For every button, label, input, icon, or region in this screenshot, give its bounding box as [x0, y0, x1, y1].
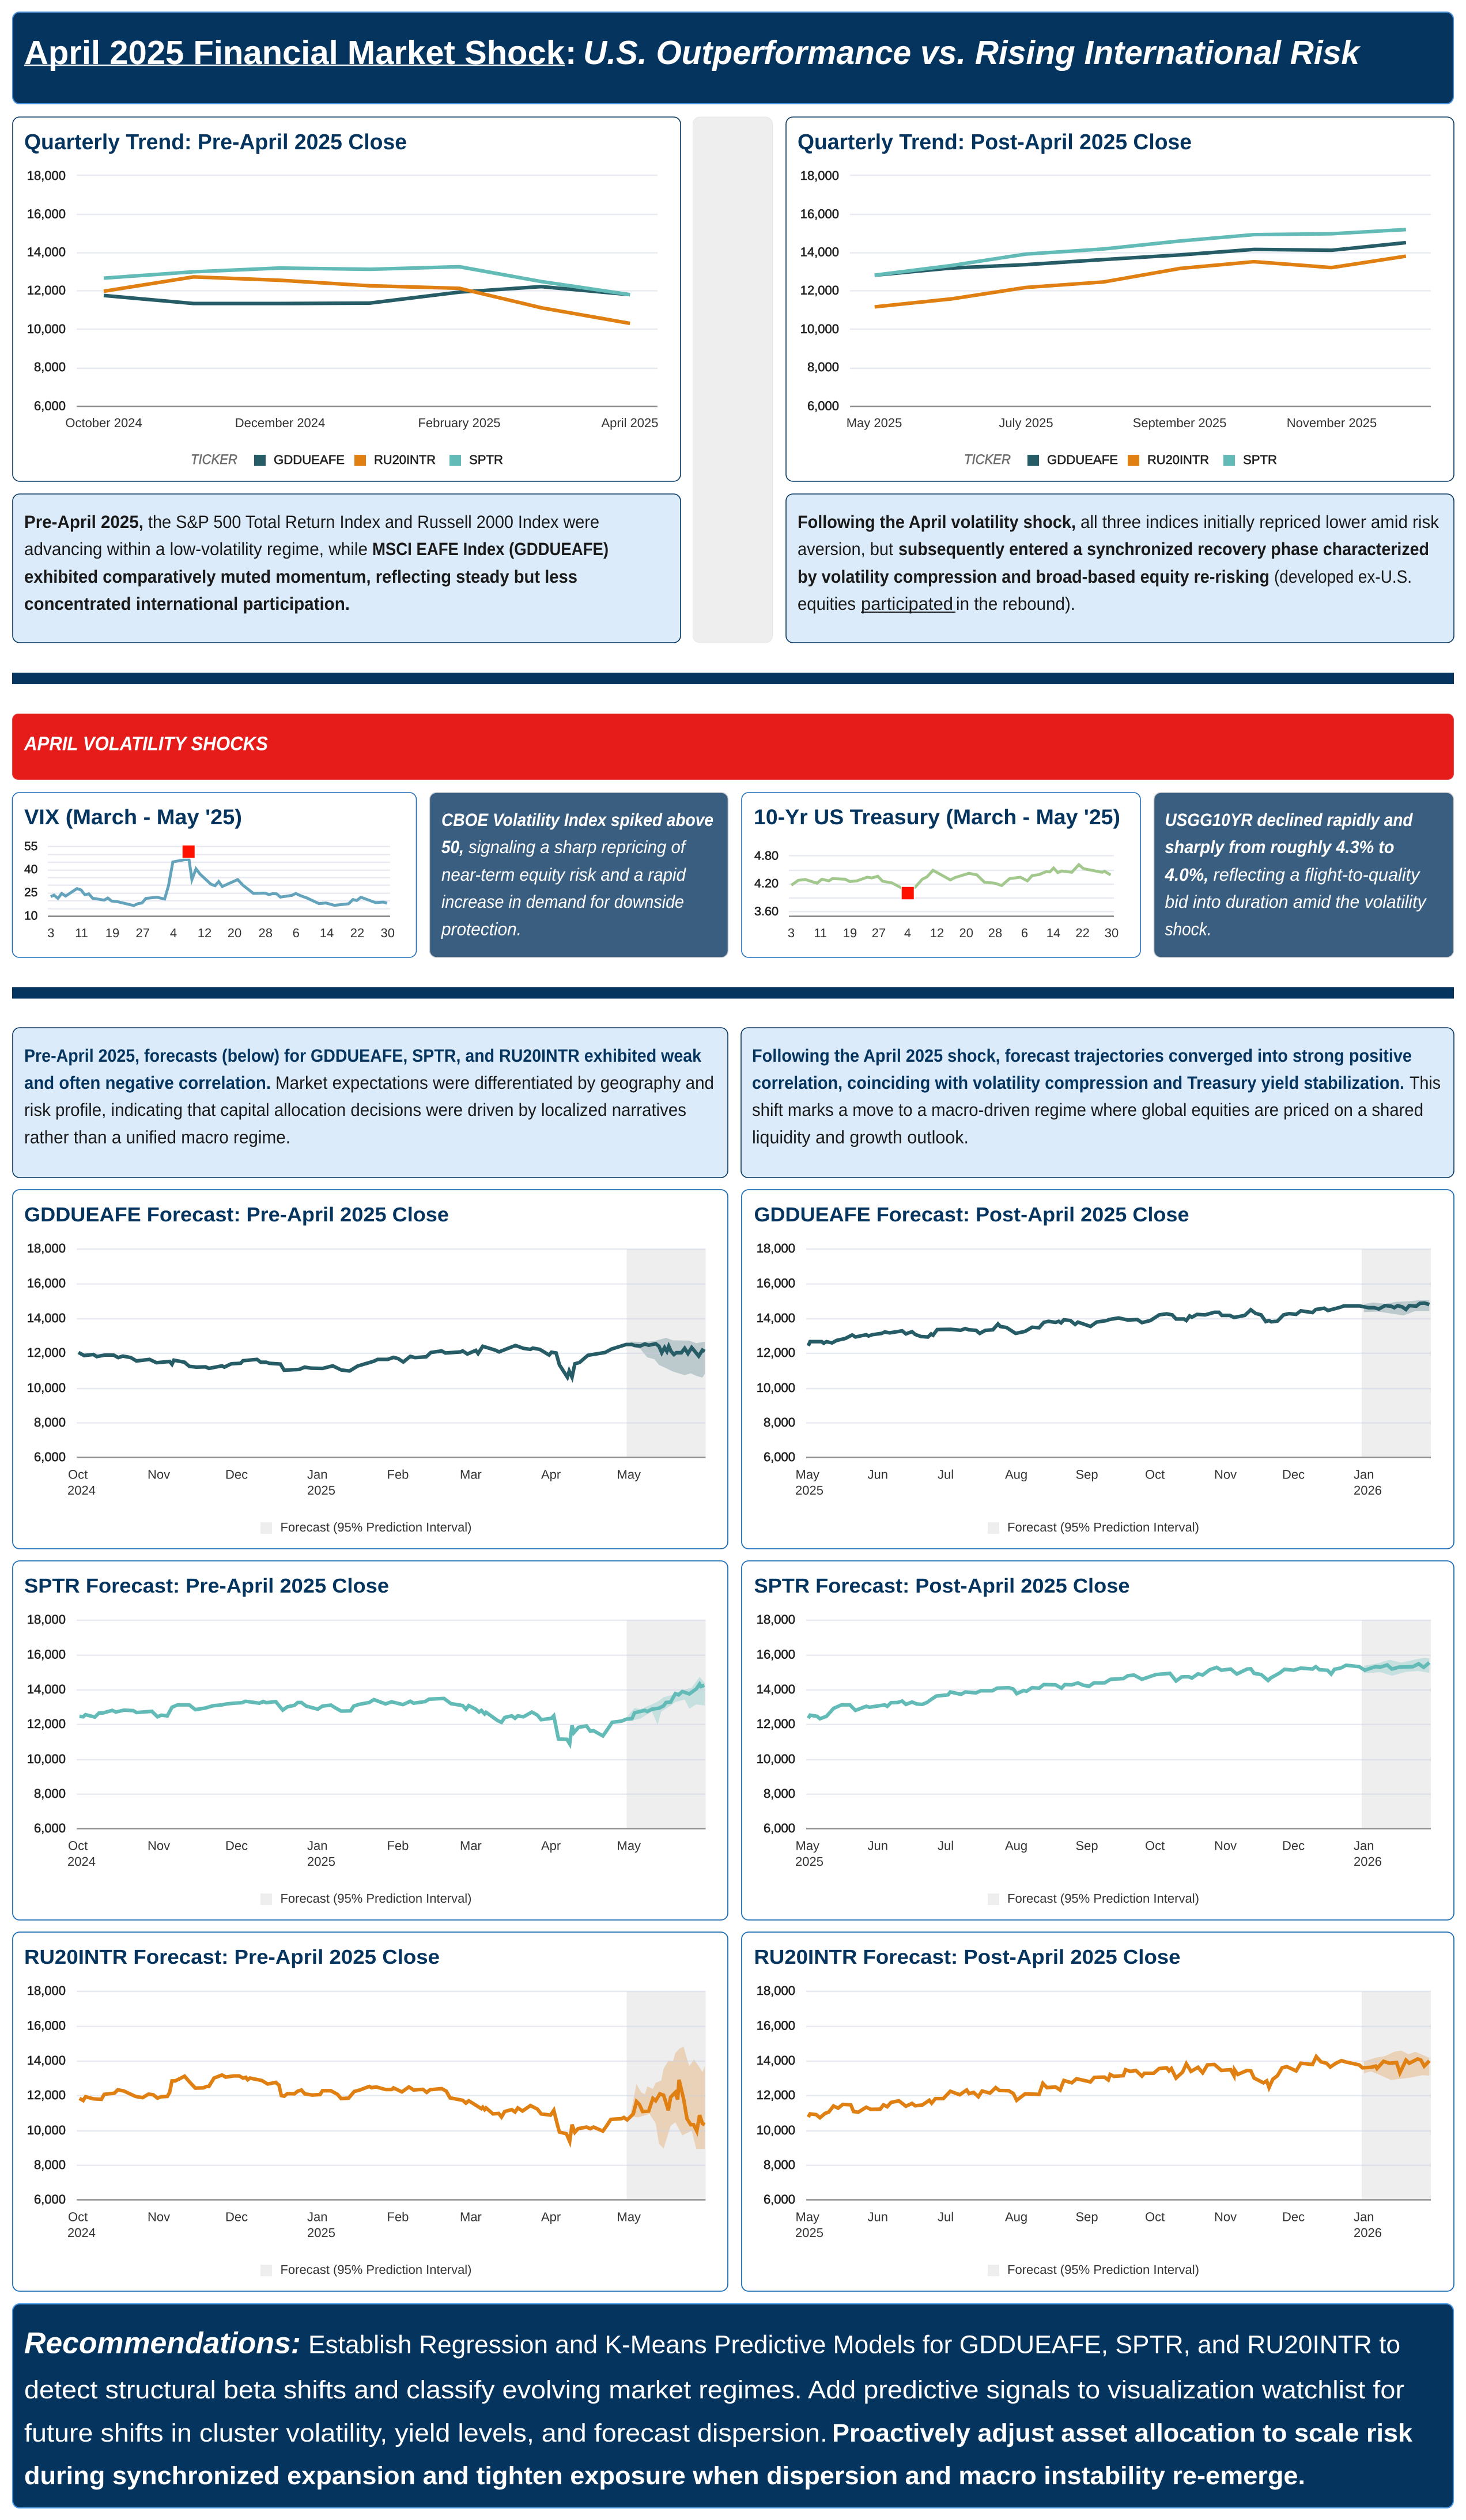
- line chart: VIX: 20: [228, 926, 241, 940]
- line chart: 10-year Treasury: 20: [959, 926, 973, 940]
- panel: post-April forecast commentary: liquidity and growth outlook.: [752, 1127, 969, 1147]
- line chart: 10-year Treasury: 22: [1075, 926, 1090, 940]
- line chart with forecast band: 2025: [795, 2225, 823, 2240]
- line chart with forecast band: 16,000: [757, 2019, 795, 2032]
- line chart with forecast band: 8,000: [764, 1415, 795, 1429]
- callout: Treasury commentary: sharply from roughly 4.3% to: [1165, 837, 1395, 857]
- panel: post-April forecast commentary: This: [1410, 1073, 1441, 1093]
- callout: Treasury commentary: bid into duration amid the volatility: [1165, 892, 1427, 912]
- line chart with forecast band: Dec: [1282, 2210, 1305, 2224]
- line chart with forecast band: 12,000: [27, 2088, 66, 2102]
- line chart: VIX: 12: [198, 926, 211, 940]
- heading: SPTR Forecast: Pre-April 2025 Close: [24, 1575, 389, 1597]
- line chart: VIX: 4: [170, 926, 177, 940]
- heading: quarterly trend post-April: Quarterly Trend: Post-April 2025 Close: [798, 130, 1192, 154]
- line chart with forecast band: Jun: [868, 1839, 888, 1853]
- line chart with forecast band: 6,000: [764, 2192, 795, 2206]
- line chart with forecast band: Oct: [68, 1839, 88, 1853]
- line chart with forecast band: May: [795, 2210, 819, 2224]
- legend: tickers: RU20INTR: [1147, 452, 1209, 467]
- panel: pre-April forecast commentary: risk profile, indicating that capital allocation decisions were driven by localized narratives: [24, 1100, 686, 1120]
- line chart with forecast band: 14,000: [757, 1682, 795, 1696]
- line chart with forecast band: 8,000: [34, 1415, 66, 1429]
- legend: tickers: [191, 452, 503, 467]
- line chart with forecast band: 2025: [795, 1483, 823, 1497]
- panel: post-April forecast commentary: correlation, coinciding with volatility compression and Treasury yield stabilization.: [752, 1073, 1404, 1093]
- line chart with forecast band: 18,000: [27, 1612, 66, 1627]
- line chart with forecast band: Jul: [938, 1468, 954, 1481]
- heading: SPTR Forecast: Post-April 2025 Close: [754, 1575, 1129, 1597]
- panel: pre-April commentary: the S&P 500 Total Return Index and Russell 2000 Index were: [148, 512, 599, 532]
- line chart with forecast band: 2026: [1354, 2225, 1382, 2240]
- panel: recommendations: Proactively adjust asset allocation to scale risk: [832, 2419, 1413, 2447]
- line chart with forecast band: Sep: [1075, 1839, 1098, 1853]
- panel: SPTR forecast post-April: [742, 1561, 1454, 1920]
- line chart with forecast band: Jun: [868, 1468, 888, 1481]
- line chart with forecast band: 10,000: [757, 1380, 795, 1395]
- panel: quarterly trend post-April: [786, 117, 1454, 481]
- line chart with forecast band: [27, 1612, 705, 1869]
- line chart with forecast band: 2026: [1354, 1483, 1382, 1497]
- line chart with forecast band: Oct: [68, 1468, 88, 1481]
- panel: RU20INTR forecast pre-April: [13, 1932, 728, 2291]
- panel: SPTR forecast pre-April: [13, 1561, 728, 1920]
- panel: pre-April commentary: [13, 494, 681, 643]
- line chart with forecast band: 2025: [307, 2225, 335, 2240]
- line chart: 10-year Treasury: 14: [1046, 926, 1060, 940]
- line chart with forecast band: 8,000: [34, 1786, 66, 1801]
- line chart with forecast band: 10,000: [27, 2123, 66, 2137]
- line chart with forecast band: 12,000: [757, 1717, 795, 1731]
- line chart: quarterly post-April: May 2025: [847, 416, 902, 430]
- line chart with forecast band: 2026: [1354, 1854, 1382, 1869]
- legend: forecast interval: Forecast (95% Prediction Interval): [1007, 2262, 1199, 2277]
- callout: VIX commentary: 50,: [441, 837, 464, 857]
- line chart: VIX: 19: [105, 926, 119, 940]
- panel: post-April commentary: all three indices initially repriced lower amid risk: [1080, 512, 1439, 532]
- line chart: 10-year Treasury: [754, 850, 1119, 940]
- line chart: 10-year Treasury: 28: [988, 926, 1002, 940]
- legend: tickers: GDDUEAFE: [274, 452, 345, 467]
- heading: GDDUEAFE Forecast: Pre-April 2025 Close: [24, 1204, 449, 1226]
- legend: tickers: SPTR: [469, 452, 503, 467]
- line chart with forecast band: 12,000: [757, 1345, 795, 1360]
- line chart: 10-year Treasury: 27: [872, 926, 886, 940]
- callout: VIX commentary: CBOE Volatility Index spiked above: [441, 810, 713, 830]
- line chart with forecast band: Oct: [1145, 1468, 1165, 1481]
- panel: post-April commentary: in the rebound).: [956, 594, 1075, 614]
- line chart: quarterly pre-April: April 2025: [601, 416, 659, 430]
- line chart with forecast band: May: [617, 1468, 641, 1481]
- line chart: 10-year Treasury: 30: [1105, 926, 1119, 940]
- line chart with forecast band: Nov: [148, 1839, 170, 1853]
- panel: post-April commentary: Following the April volatility shock,: [798, 512, 1076, 532]
- line chart with forecast band: 6,000: [34, 1821, 66, 1835]
- callout: Treasury commentary: shock.: [1165, 919, 1211, 940]
- heading: VIX: VIX (March - May '25): [24, 805, 242, 829]
- panel: GDDUEAFE forecast pre-April: [13, 1190, 728, 1549]
- legend: tickers: TICKER: [191, 452, 237, 467]
- line chart: VIX: [24, 840, 395, 940]
- line chart with forecast band: 14,000: [757, 2053, 795, 2068]
- heading: 10-year Treasury: 10-Yr US Treasury (March - May '25): [754, 805, 1120, 829]
- heading: quarterly trend pre-April: Quarterly Trend: Pre-April 2025 Close: [24, 130, 407, 154]
- title banner: [13, 12, 1453, 104]
- panel: empty gray divider column: [693, 117, 772, 643]
- line chart: quarterly post-April: 10,000: [800, 322, 839, 336]
- panel: quarterly trend pre-April: [13, 117, 681, 481]
- line chart: quarterly post-April: 6,000: [807, 399, 839, 413]
- line chart with forecast band: Jan: [307, 2210, 327, 2224]
- line chart with forecast band: [757, 1241, 1431, 1497]
- line chart: quarterly post-April: [800, 168, 1431, 430]
- line chart with forecast band: Mar: [460, 1839, 482, 1853]
- legend: tickers: TICKER: [964, 452, 1011, 467]
- panel: recommendations: Establish Regression and K-Means Predictive Models for GDDUEAFE, SPTR, and RU20INTR to: [308, 2331, 1400, 2359]
- line chart: quarterly post-April: 12,000: [800, 283, 839, 297]
- callout: VIX commentary: signaling a sharp repricing of: [468, 837, 687, 857]
- panel: post-April commentary: aversion, but: [798, 539, 893, 559]
- line chart with forecast band: 6,000: [34, 1450, 66, 1464]
- line chart with forecast band: 6,000: [764, 1821, 795, 1835]
- title banner: April 2025 Financial Market Shock: [24, 34, 565, 71]
- line chart with forecast band: Jan: [1354, 1468, 1374, 1481]
- line chart with forecast band: Feb: [387, 2210, 409, 2224]
- line chart with forecast band: 18,000: [27, 1241, 66, 1255]
- line chart: VIX: 27: [136, 926, 150, 940]
- line chart: VIX: 25: [24, 886, 37, 899]
- line chart: quarterly pre-April: February 2025: [418, 416, 501, 430]
- line chart: quarterly pre-April: 18,000: [27, 168, 66, 183]
- line chart with forecast band: 16,000: [27, 1647, 66, 1661]
- panel: post-April commentary: by volatility compression and broad-based equity re-risking: [798, 567, 1269, 587]
- line chart with forecast band: 10,000: [27, 1752, 66, 1766]
- legend: forecast interval: Forecast (95% Prediction Interval): [1007, 1891, 1199, 1906]
- marker: VIX peak: [182, 845, 195, 858]
- line chart with forecast band: 6,000: [34, 2192, 66, 2206]
- line chart with forecast band: Dec: [1282, 1468, 1305, 1481]
- panel: pre-April commentary: MSCI EAFE Index (GDDUEAFE): [372, 539, 609, 559]
- line chart: VIX: 22: [350, 926, 364, 940]
- legend: tickers: [964, 452, 1277, 467]
- line chart with forecast band: 18,000: [27, 1983, 66, 1998]
- panel: recommendations: detect structural beta shifts and classify evolving market regimes. Add predictive signals to visualization watchlist for: [24, 2376, 1404, 2404]
- line chart: quarterly pre-April: [27, 168, 659, 430]
- panel: post-April forecast commentary: Following the April 2025 shock, forecast trajectories converged into strong positive: [752, 1046, 1412, 1066]
- callout: VIX commentary: increase in demand for downside: [441, 892, 684, 912]
- line chart with forecast band: 16,000: [27, 1276, 66, 1290]
- panel: recommendations: [13, 2304, 1453, 2508]
- section banner: April volatility shocks: APRIL VOLATILITY SHOCKS: [24, 733, 268, 755]
- panel: post-April commentary: equities: [798, 594, 856, 614]
- line chart with forecast band: Apr: [541, 1468, 561, 1481]
- panel: pre-April forecast commentary: Market expectations were differentiated by geography and: [275, 1073, 714, 1093]
- panel: VIX chart: [13, 793, 416, 957]
- panel: post-April forecast commentary: shift marks a move to a macro-driven regime where global equities are priced on a shared: [752, 1100, 1423, 1120]
- line chart with forecast band: 2024: [67, 1854, 96, 1869]
- line chart with forecast band: May: [795, 1468, 819, 1481]
- line chart with forecast band: Nov: [1214, 1468, 1237, 1481]
- line chart with forecast band: 12,000: [757, 2088, 795, 2102]
- panel: recommendations: Recommendations:: [24, 2326, 301, 2360]
- line chart with forecast band: 12,000: [27, 1345, 66, 1360]
- line chart with forecast band: 2025: [795, 1854, 823, 1869]
- line chart with forecast band: Feb: [387, 1468, 409, 1481]
- panel: pre-April commentary: concentrated international participation.: [24, 594, 350, 614]
- line chart: quarterly pre-April: 16,000: [27, 206, 66, 221]
- line chart: quarterly post-April: 18,000: [800, 168, 839, 183]
- line chart with forecast band: Jun: [868, 2210, 888, 2224]
- line chart: quarterly post-April: 8,000: [807, 360, 839, 374]
- panel: recommendations: future shifts in cluster volatility, yield levels, and forecast dispersion.: [24, 2419, 828, 2447]
- line chart with forecast band: Feb: [387, 1839, 409, 1853]
- line chart: quarterly pre-April: October 2024: [65, 416, 142, 430]
- line chart with forecast band: 8,000: [764, 1786, 795, 1801]
- line chart: VIX: 30: [380, 926, 395, 940]
- panel: post-April forecast commentary: [741, 1028, 1454, 1178]
- legend: forecast interval: Forecast (95% Prediction Interval): [280, 2262, 471, 2277]
- line chart with forecast band: Mar: [460, 2210, 482, 2224]
- line chart: 10-year Treasury: 12: [930, 926, 944, 940]
- line chart: 10-year Treasury: 4.80: [754, 850, 779, 862]
- line chart with forecast band: Dec: [225, 1468, 248, 1481]
- line chart: quarterly post-April: 14,000: [800, 244, 839, 259]
- line chart: quarterly post-April: 16,000: [800, 206, 839, 221]
- line chart: VIX: 10: [24, 910, 37, 922]
- line chart: quarterly pre-April: 8,000: [34, 360, 66, 374]
- line chart with forecast band: [757, 1612, 1431, 1869]
- legend: forecast interval: Forecast (95% Prediction Interval): [280, 1891, 471, 1906]
- callout: VIX commentary: protection.: [441, 919, 522, 940]
- legend: tickers: GDDUEAFE: [1047, 452, 1118, 467]
- line chart with forecast band: Jul: [938, 1839, 954, 1853]
- line chart: quarterly post-April: July 2025: [999, 416, 1053, 430]
- line chart with forecast band: 2025: [307, 1483, 335, 1497]
- line chart with forecast band: 14,000: [27, 1311, 66, 1325]
- line chart with forecast band: May: [617, 1839, 641, 1853]
- line chart with forecast band: Nov: [148, 2210, 170, 2224]
- line chart with forecast band: May: [795, 1839, 819, 1853]
- panel: pre-April commentary: Pre-April 2025,: [24, 512, 143, 532]
- line chart: quarterly pre-April: 6,000: [34, 399, 66, 413]
- line chart: quarterly pre-April: 12,000: [27, 283, 66, 297]
- line chart with forecast band: 12,000: [27, 1717, 66, 1731]
- line chart: VIX: 28: [258, 926, 273, 940]
- line chart: VIX: 14: [320, 926, 334, 940]
- legend: tickers: SPTR: [1243, 452, 1277, 467]
- panel: post-April commentary: [786, 494, 1454, 643]
- line chart with forecast band: 8,000: [764, 2157, 795, 2172]
- line chart with forecast band: Aug: [1005, 1468, 1027, 1481]
- line chart: quarterly pre-April: 10,000: [27, 322, 66, 336]
- callout: Treasury commentary: USGG10YR declined rapidly and: [1165, 810, 1413, 830]
- line chart with forecast band: Apr: [541, 1839, 561, 1853]
- line chart: 10-year Treasury: 3: [788, 926, 795, 940]
- line chart with forecast band: Nov: [1214, 2210, 1237, 2224]
- line chart with forecast band: Oct: [68, 2210, 88, 2224]
- line chart with forecast band: Aug: [1005, 1839, 1027, 1853]
- line chart: quarterly post-April: November 2025: [1287, 416, 1377, 430]
- line chart: 10-year Treasury: 11: [814, 926, 827, 940]
- line chart with forecast band: 14,000: [27, 1682, 66, 1696]
- panel: 10-year Treasury chart: [742, 793, 1140, 957]
- line chart: 10-year Treasury: 4: [904, 926, 911, 940]
- line chart with forecast band: 2024: [67, 1483, 96, 1497]
- line chart: VIX: 3: [47, 926, 55, 940]
- line chart with forecast band: Jan: [307, 1468, 327, 1481]
- line chart with forecast band: 10,000: [757, 1752, 795, 1766]
- line chart with forecast band: 14,000: [757, 1311, 795, 1325]
- line chart: 10-year Treasury: 3.60: [754, 905, 779, 918]
- line chart with forecast band: 10,000: [27, 1380, 66, 1395]
- line chart with forecast band: 16,000: [27, 2019, 66, 2032]
- panel: post-April commentary: subsequently entered a synchronized recovery phase characterized: [898, 539, 1429, 559]
- line chart with forecast band: Jan: [307, 1839, 327, 1853]
- heading: GDDUEAFE Forecast: Post-April 2025 Close: [754, 1204, 1189, 1226]
- line chart: quarterly post-April: September 2025: [1133, 416, 1226, 430]
- line chart with forecast band: [27, 1983, 705, 2240]
- line chart with forecast band: 2025: [307, 1854, 335, 1869]
- line chart with forecast band: Dec: [225, 2210, 248, 2224]
- heading: RU20INTR Forecast: Pre-April 2025 Close: [24, 1946, 440, 1968]
- line chart with forecast band: 6,000: [764, 1450, 795, 1464]
- line chart with forecast band: 14,000: [27, 2053, 66, 2068]
- panel: GDDUEAFE forecast post-April: [742, 1190, 1454, 1549]
- panel: pre-April commentary: advancing within a low-volatility regime, while: [24, 539, 368, 559]
- line chart with forecast band: 18,000: [757, 1612, 795, 1627]
- line chart with forecast band: 18,000: [757, 1983, 795, 1998]
- line chart with forecast band: Nov: [1214, 1839, 1237, 1853]
- panel: pre-April forecast commentary: Pre-April 2025, forecasts (below) for GDDUEAFE, SPTR, and RU20INTR exhibited weak: [24, 1046, 702, 1066]
- line chart with forecast band: [27, 1241, 705, 1497]
- callout: VIX commentary: near-term equity risk and a rapid: [441, 865, 687, 885]
- line chart with forecast band: Apr: [541, 2210, 561, 2224]
- line chart with forecast band: Sep: [1075, 2210, 1098, 2224]
- line chart with forecast band: 8,000: [34, 2157, 66, 2172]
- line chart with forecast band: May: [617, 2210, 641, 2224]
- line chart with forecast band: [757, 1983, 1431, 2240]
- callout: Treasury commentary: reflecting a flight-to-quality: [1214, 865, 1421, 885]
- section banner: April volatility shocks: [13, 714, 1453, 779]
- heading: RU20INTR Forecast: Post-April 2025 Close: [754, 1946, 1180, 1968]
- line chart: 10-year Treasury: 19: [843, 926, 857, 940]
- line chart with forecast band: Dec: [1282, 1839, 1305, 1853]
- callout: Treasury commentary: 4.0%,: [1165, 865, 1209, 885]
- panel: RU20INTR forecast post-April: [742, 1932, 1454, 2291]
- line chart: 10-year Treasury: 4.20: [754, 877, 779, 891]
- line chart with forecast band: Mar: [460, 1468, 482, 1481]
- line chart: VIX: 55: [24, 840, 37, 853]
- line chart with forecast band: 10,000: [757, 2123, 795, 2137]
- line chart with forecast band: Nov: [148, 1468, 170, 1481]
- marker: Treasury trough: [901, 886, 914, 900]
- line chart with forecast band: Oct: [1145, 1839, 1165, 1853]
- panel: post-April commentary: (developed ex-U.S.: [1274, 567, 1412, 587]
- line chart with forecast band: Jan: [1354, 2210, 1374, 2224]
- legend: forecast interval: Forecast (95% Prediction Interval): [280, 1520, 471, 1534]
- legend: tickers: RU20INTR: [374, 452, 436, 467]
- line chart with forecast band: Jul: [938, 2210, 954, 2224]
- line chart with forecast band: 16,000: [757, 1276, 795, 1290]
- line chart with forecast band: Oct: [1145, 2210, 1165, 2224]
- line chart with forecast band: 2024: [67, 2225, 96, 2240]
- line chart: VIX: 11: [75, 926, 88, 940]
- title banner: U.S. Outperformance vs. Rising International Risk: [583, 34, 1361, 71]
- panel: pre-April forecast commentary: and often negative correlation.: [24, 1073, 271, 1093]
- line chart with forecast band: 16,000: [757, 1647, 795, 1661]
- line chart with forecast band: 18,000: [757, 1241, 795, 1255]
- panel: pre-April commentary: exhibited comparatively muted momentum, reflecting steady but less: [24, 567, 577, 587]
- panel: pre-April forecast commentary: [13, 1028, 728, 1178]
- line chart with forecast band: Sep: [1075, 1468, 1098, 1481]
- line chart: VIX: 6: [293, 926, 300, 940]
- callout: VIX commentary: [430, 793, 728, 957]
- title banner: :: [565, 34, 576, 71]
- panel: post-April commentary: participated: [861, 594, 953, 614]
- line chart: 10-year Treasury: 6: [1021, 926, 1028, 940]
- callout: Treasury commentary: [1154, 793, 1453, 957]
- line chart: quarterly pre-April: 14,000: [27, 244, 66, 259]
- panel: recommendations: during synchronized expansion and tighten exposure when dispersion and macro instability re-emerge.: [24, 2462, 1305, 2490]
- line chart with forecast band: Aug: [1005, 2210, 1027, 2224]
- legend: forecast interval: Forecast (95% Prediction Interval): [1007, 1520, 1199, 1534]
- panel: pre-April forecast commentary: rather than a unified macro regime.: [24, 1127, 290, 1147]
- line chart: quarterly pre-April: December 2024: [235, 416, 325, 430]
- line chart: VIX: 40: [24, 863, 37, 876]
- line chart with forecast band: Jan: [1354, 1839, 1374, 1853]
- line chart with forecast band: Dec: [225, 1839, 248, 1853]
